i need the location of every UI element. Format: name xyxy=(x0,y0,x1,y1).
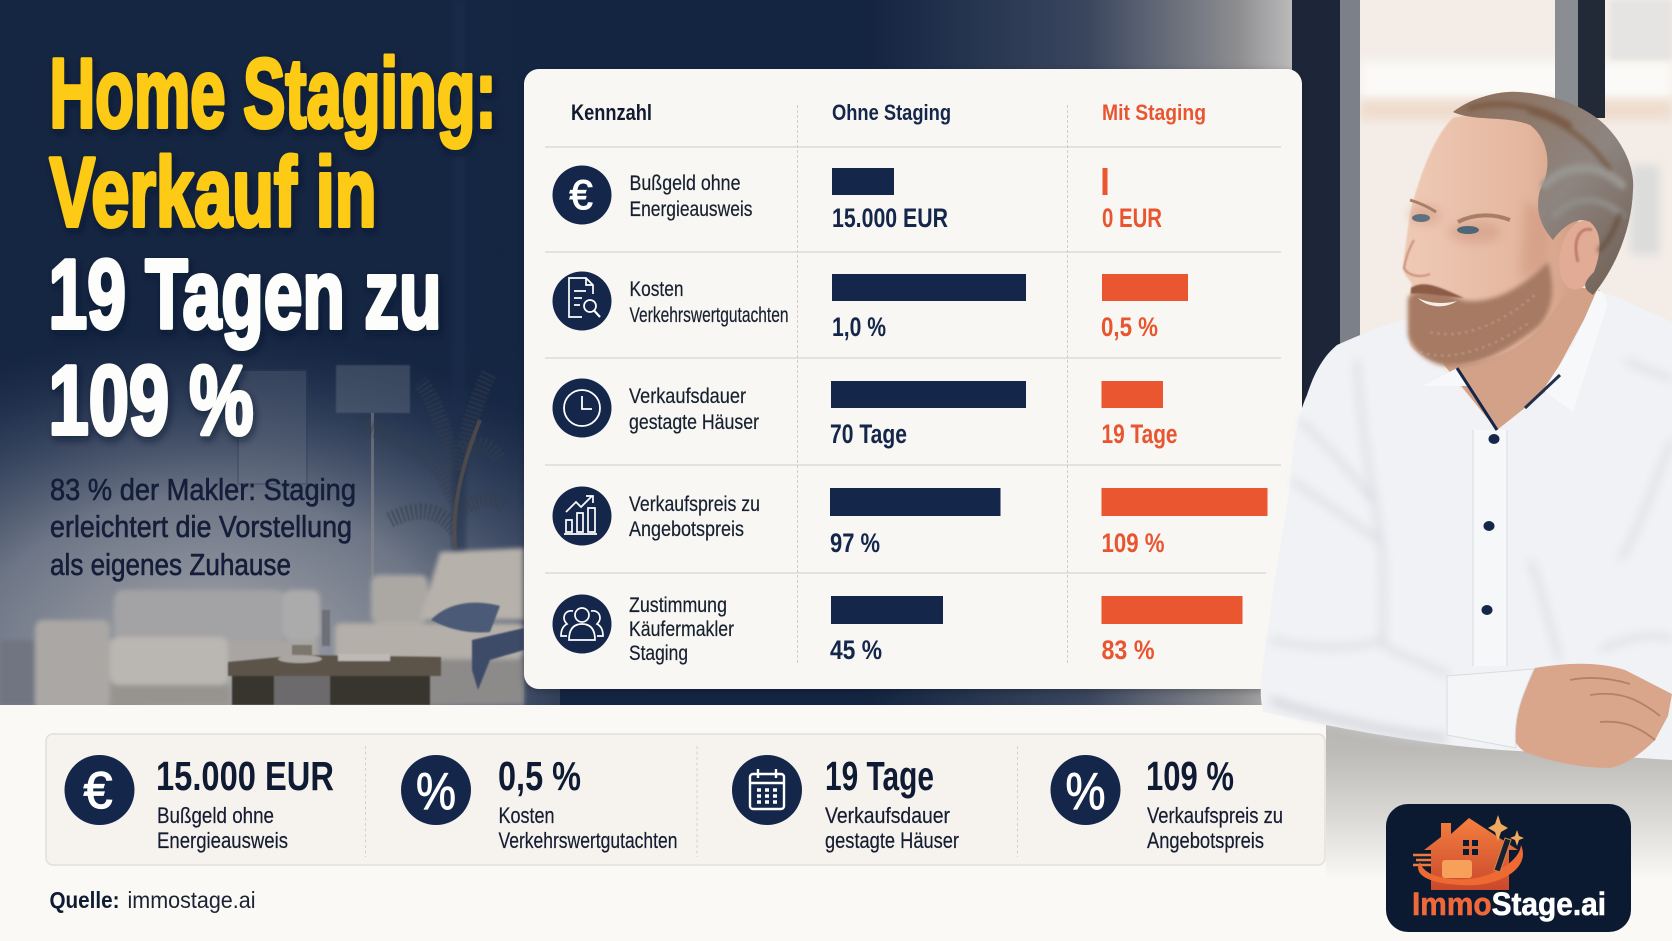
icon: rising chart xyxy=(552,486,612,546)
title: Home Staging: xyxy=(50,38,496,148)
beard texture xyxy=(1420,295,1535,355)
face shading xyxy=(1409,200,1550,280)
ear xyxy=(1553,217,1607,293)
KPI: Kosten: % xyxy=(416,763,456,821)
KPI: Bußgeld: € xyxy=(84,762,113,820)
KPI: Kosten: Verkehrswertgutachten xyxy=(498,828,678,853)
bottom white band xyxy=(0,705,1672,941)
KPI: Kosten: 0,5 % xyxy=(498,753,581,799)
subtitle xyxy=(50,472,356,582)
KPI: Kosten xyxy=(401,753,678,853)
background: dark room gradient xyxy=(0,0,1672,705)
collar xyxy=(1423,290,1607,430)
KPI: Bußgeld xyxy=(64,753,334,853)
title: 19 Tagen zu xyxy=(48,239,442,349)
KPI: Verkaufsdauer xyxy=(732,753,959,853)
background: living room photo xyxy=(0,0,560,710)
row: Zustimmung Käufermakler: 45 % xyxy=(830,635,882,665)
row: Bußgeld xyxy=(552,166,1162,233)
mouth xyxy=(1418,298,1457,306)
hair strands xyxy=(1470,104,1622,250)
KPI: Verkaufsdauer: Verkaufsdauer xyxy=(825,803,950,828)
KPI: Verkaufspreis: Verkaufspreis zu xyxy=(1147,803,1283,828)
title: 109 % xyxy=(48,345,254,455)
neck xyxy=(1440,285,1600,430)
logo wordmark: ImmoStage.ai xyxy=(1412,886,1606,922)
KPI: Bußgeld: Energieausweis xyxy=(157,828,288,853)
KPI: Verkaufspreis xyxy=(1050,753,1283,853)
icon: house with swoosh xyxy=(1413,815,1524,890)
row: Kosten Verkehrswertgutachten: 1,0 % xyxy=(832,312,886,342)
row: Verkaufsdauer: Verkaufsdauer xyxy=(629,385,746,408)
beard xyxy=(1408,262,1552,366)
row: Verkaufsdauer: 19 Tage xyxy=(1102,419,1178,449)
title: Verkauf in xyxy=(50,137,376,247)
logo: ImmoStage.ai xyxy=(1386,804,1631,932)
title xyxy=(48,38,496,455)
row: Zustimmung Käufermakler xyxy=(552,594,1242,665)
icon: euro: € xyxy=(569,171,593,218)
face xyxy=(1403,114,1584,365)
KPI: Verkaufsdauer: 19 Tage xyxy=(825,753,934,799)
hand xyxy=(1510,664,1672,768)
source xyxy=(50,887,256,913)
person: man in white shirt xyxy=(1261,92,1672,768)
row: Bußgeld: Energieausweis xyxy=(630,198,752,221)
row: Bußgeld: 0 EUR xyxy=(1102,203,1162,233)
row: Verkaufspreis zu Angebotspreis: Angebotspreis xyxy=(629,518,744,541)
KPI: Verkaufspreis: 109 % xyxy=(1146,753,1234,799)
row: Kosten Verkehrswertgutachten xyxy=(552,272,1188,342)
subtitle: erleichtert die Vorstellung xyxy=(50,509,352,544)
icon: calendar xyxy=(750,769,784,809)
icon: clock xyxy=(552,378,612,438)
KPI: Kosten: Kosten xyxy=(498,803,554,828)
table surface xyxy=(1326,705,1672,880)
row: Zustimmung Käufermakler: Käufermakler xyxy=(629,618,734,641)
cuff xyxy=(1447,669,1534,748)
hair xyxy=(1453,92,1633,295)
row: Verkaufspreis zu Angebotspreis: Verkaufspreis zu xyxy=(629,493,760,516)
row: Verkaufspreis zu Angebotspreis: 109 % xyxy=(1102,528,1164,558)
KPI: Bußgeld: Bußgeld ohne xyxy=(157,803,274,828)
row: Verkaufsdauer: gestagte Häuser xyxy=(629,411,759,434)
row: Kosten Verkehrswertgutachten: 0,5 % xyxy=(1101,312,1158,342)
row: Verkaufsdauer xyxy=(552,378,1178,449)
table grid lines xyxy=(545,105,1281,663)
KPI: Verkaufsdauer: gestagte Häuser xyxy=(825,828,959,853)
table header: Mit Staging xyxy=(1102,100,1206,125)
placket with buttons xyxy=(1473,430,1507,666)
icon: people xyxy=(552,594,612,654)
table header xyxy=(571,100,1206,125)
subtitle: als eigenes Zuhause xyxy=(50,547,291,582)
background: window with frames xyxy=(1292,0,1672,705)
subtitle: 83 % der Makler: Staging xyxy=(50,472,356,507)
row: Verkaufspreis zu Angebotspreis: 97 % xyxy=(830,528,880,558)
panel: KPI strip xyxy=(46,734,1325,865)
row: Verkaufsdauer: 70 Tage xyxy=(830,419,907,449)
icon: euro xyxy=(552,166,612,224)
KPI: Verkaufspreis: % xyxy=(1066,763,1106,821)
source: immostage.ai xyxy=(128,887,256,913)
row: Kosten Verkehrswertgutachten: Verkehrswertgutachten xyxy=(630,304,788,327)
row: Zustimmung Käufermakler: 83 % xyxy=(1102,635,1154,665)
panel: comparison table xyxy=(524,69,1302,689)
table header: Kennzahl xyxy=(571,100,652,125)
shirt xyxy=(1261,290,1672,760)
row: Bußgeld: Bußgeld ohne xyxy=(630,172,740,195)
eyes and brows xyxy=(1404,200,1510,276)
row: Zustimmung Käufermakler: Zustimmung xyxy=(629,594,727,617)
KPI: Bußgeld: 15.000 EUR xyxy=(156,753,334,799)
moustache xyxy=(1411,284,1464,298)
source: Quelle: xyxy=(50,887,120,913)
icon: document search xyxy=(552,272,612,330)
row: Kosten Verkehrswertgutachten: Kosten xyxy=(630,278,684,301)
shirt folds xyxy=(1270,360,1672,738)
KPI: Verkaufspreis: Angebotspreis xyxy=(1147,828,1264,853)
row: Zustimmung Käufermakler: Staging xyxy=(629,642,688,665)
row: Verkaufspreis zu Angebotspreis xyxy=(552,486,1268,558)
row: Bußgeld: 15.000 EUR xyxy=(832,203,948,233)
table header: Ohne Staging xyxy=(832,100,951,125)
